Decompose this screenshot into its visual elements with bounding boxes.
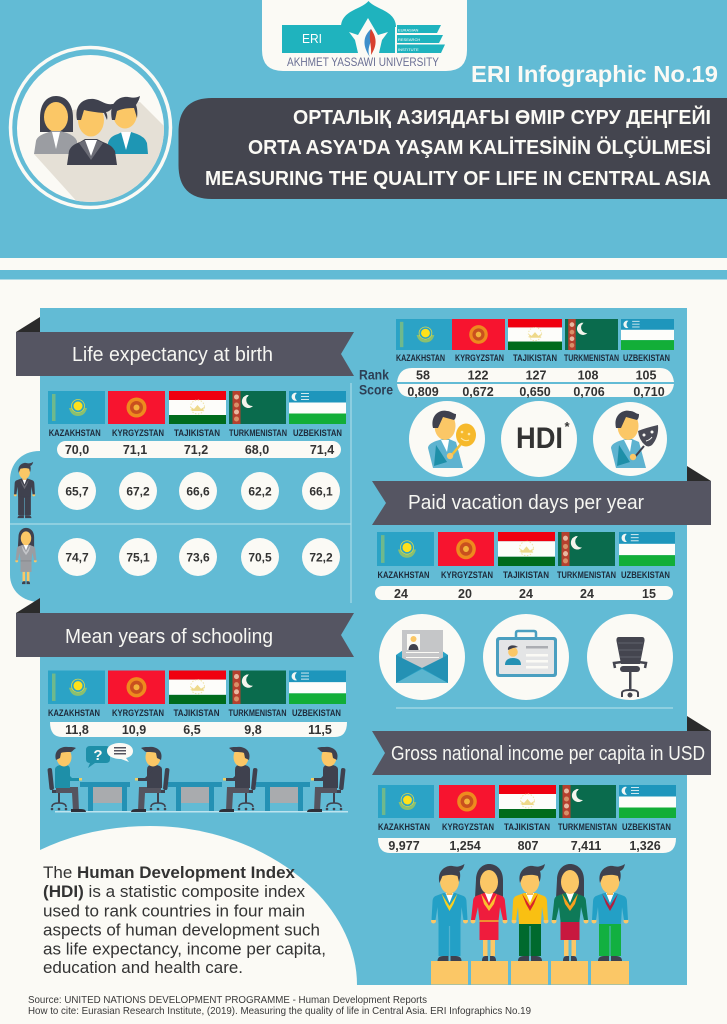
country labels: TAJIKISTAN xyxy=(174,428,220,439)
icon: ID badge xyxy=(483,614,569,700)
country labels: KYRGYZSTAN xyxy=(112,428,164,439)
logo: ERI Akhmet Yassawi University: AKHMET YASSAWI UNIVERSITY xyxy=(287,55,439,69)
male values: 65,7 xyxy=(65,484,89,498)
total values: 68,0 xyxy=(245,443,269,457)
text block: HDI definition: (HDI) is a statistic composite index xyxy=(43,882,305,901)
female values: 70,5 xyxy=(248,550,272,564)
values: 807 xyxy=(518,839,538,853)
total values: 71,2 xyxy=(184,443,208,457)
ribbon heading: gross national income xyxy=(372,716,711,775)
country labels xyxy=(49,428,342,439)
flags row xyxy=(396,319,674,350)
rank and score table: 127 xyxy=(526,368,546,382)
male values: 66,1 xyxy=(309,484,333,498)
panel: life expectancy xyxy=(14,317,354,584)
illustration: meeting at tables xyxy=(47,743,348,812)
female values: 72,2 xyxy=(309,550,333,564)
male values xyxy=(58,472,340,510)
female values: 74,7 xyxy=(65,550,89,564)
country labels: UZBEKISTAN xyxy=(293,428,342,439)
rank and score table: 0,809 xyxy=(407,385,439,399)
flags row xyxy=(48,670,346,704)
country labels: TURKMENISTAN xyxy=(558,822,617,833)
country labels: KYRGYZSTAN xyxy=(112,708,164,719)
rank and score table: 108 xyxy=(578,368,598,382)
values: 10,9 xyxy=(122,723,146,737)
female values: 73,6 xyxy=(186,550,210,564)
icon: HDI circle: * xyxy=(564,419,570,434)
main blue panel xyxy=(10,308,687,985)
rank and score table: 58 xyxy=(416,368,430,382)
icon: HDI circle: HDI xyxy=(516,422,563,455)
country labels: KYRGYZSTAN xyxy=(442,822,494,833)
source and citation xyxy=(28,994,531,1017)
text block: HDI definition: education and health care. xyxy=(43,958,243,977)
rank and score table: 0,706 xyxy=(573,385,605,399)
values: 9,8 xyxy=(244,723,262,737)
divider lines xyxy=(10,383,673,708)
values: 11,8 xyxy=(65,723,89,737)
rank and score table: Rank xyxy=(359,366,389,382)
country labels: KYRGYZSTAN xyxy=(441,570,493,581)
values xyxy=(50,722,347,737)
values: 24 xyxy=(394,587,408,601)
header band xyxy=(0,0,727,280)
country labels: TAJIKISTAN xyxy=(504,822,550,833)
icon: man with dark mask xyxy=(593,402,667,476)
rank and score table: 105 xyxy=(636,368,656,382)
flags row xyxy=(378,785,676,818)
values: 24 xyxy=(580,587,594,601)
country labels: UZBEKISTAN xyxy=(621,570,670,581)
country labels: TAJIKISTAN xyxy=(513,353,557,364)
total values: 71,1 xyxy=(123,443,147,457)
title pill xyxy=(178,98,727,199)
infographic number: ERI Infographic No.19 xyxy=(471,61,718,87)
values: 20 xyxy=(458,587,472,601)
rank and score table: Score xyxy=(359,382,393,398)
title pill: MEASURING THE QUALITY OF LIFE IN CENTRAL ASIA xyxy=(205,168,711,190)
total values xyxy=(57,441,341,458)
values xyxy=(375,586,673,601)
logo: ERI Akhmet Yassawi University: ERI xyxy=(302,32,322,46)
country labels: TURKMENISTAN xyxy=(229,428,287,439)
icon: office chair xyxy=(587,614,673,700)
flags row xyxy=(377,532,675,566)
country labels: KAZAKHSTAN xyxy=(49,428,101,439)
female values: 75,1 xyxy=(126,550,150,564)
ribbon heading: paid vacation days per year: Paid vacation days per year xyxy=(408,492,644,514)
title pill: ORTA ASYA'DA YAŞAM KALİTESİNİN ÖLÇÜLMESİ xyxy=(248,136,711,159)
rank and score table xyxy=(359,366,674,399)
icon: woman xyxy=(15,528,37,584)
country labels: TURKMENISTAN xyxy=(557,570,616,581)
country labels: TAJIKISTAN xyxy=(503,570,549,581)
icon: envelope with CV xyxy=(379,614,465,700)
country labels: KAZAKHSTAN xyxy=(396,353,445,364)
text block: HDI definition: used to rank countries in four main xyxy=(43,902,305,920)
values: 9,977 xyxy=(388,839,420,853)
total values: 70,0 xyxy=(65,443,89,457)
text block: HDI definition: as life expectancy, income per capita, xyxy=(43,940,326,958)
rank and score table: 122 xyxy=(468,368,488,382)
rank and score table: 0,672 xyxy=(462,385,494,399)
logo: ERI Akhmet Yassawi University xyxy=(262,0,467,71)
country labels: UZBEKISTAN xyxy=(292,708,341,719)
values: 1,326 xyxy=(629,839,661,853)
icon: three business people in circle xyxy=(10,48,170,208)
country labels: UZBEKISTAN xyxy=(623,353,670,364)
ribbon heading: paid vacation days per year xyxy=(372,466,711,525)
country labels xyxy=(378,822,671,833)
total values: 71,4 xyxy=(310,443,334,457)
source and citation: Source: UNITED NATIONS DEVELOPMENT PROGRAMME - Human Development Reports xyxy=(28,994,427,1006)
panel: paid vacation days xyxy=(372,466,711,700)
country labels: KAZAKHSTAN xyxy=(48,708,100,719)
values: 1,254 xyxy=(449,839,481,853)
title pill: ОРТАЛЫҚ АЗИЯДАҒЫ ӨМІР СҮРУ ДЕҢГЕЙІ xyxy=(293,105,711,129)
country labels: TURKMENISTAN xyxy=(228,708,287,719)
ribbon heading: mean years of schooling: Mean years of schooling xyxy=(65,626,273,648)
country labels xyxy=(48,708,341,719)
ribbon heading: mean years of schooling xyxy=(16,598,354,657)
values: 15 xyxy=(642,587,656,601)
logo: ERI Akhmet Yassawi University: EURASIAN xyxy=(398,28,419,32)
country labels: TURKMENISTAN xyxy=(564,353,619,364)
illustration: meeting at tables: ? xyxy=(93,747,103,764)
male values: 67,2 xyxy=(126,484,150,498)
male values: 62,2 xyxy=(248,484,272,498)
panel: HDI xyxy=(359,319,674,477)
values: 6,5 xyxy=(183,723,201,737)
rank and score table: 0,710 xyxy=(633,385,665,399)
values: 11,5 xyxy=(308,723,332,737)
flags row xyxy=(48,391,346,424)
values xyxy=(378,838,676,853)
country labels xyxy=(396,353,670,364)
ribbon heading: life expectancy at birth xyxy=(16,317,354,376)
text block: HDI definition: The Human Development Index xyxy=(43,863,296,882)
source and citation: How to cite: Eurasian Research Institute, (2019). Measuring the quality of life in Central Asia. ERI Infographics No.19 xyxy=(28,1005,531,1017)
illustration: five people on podiums xyxy=(431,864,629,984)
panel: mean years of schooling xyxy=(16,598,354,812)
country labels: KYRGYZSTAN xyxy=(455,353,504,364)
values: 24 xyxy=(519,587,533,601)
rank and score table: 0,650 xyxy=(519,385,551,399)
country labels: TAJIKISTAN xyxy=(174,708,220,719)
country labels: UZBEKISTAN xyxy=(622,822,671,833)
icon: man with happy mask xyxy=(409,401,485,477)
ribbon heading: life expectancy at birth: Life expectancy at birth xyxy=(72,344,273,366)
female values xyxy=(58,538,340,576)
country labels: KAZAKHSTAN xyxy=(378,822,430,833)
male values: 66,6 xyxy=(186,484,210,498)
country labels xyxy=(378,570,670,581)
values: 7,411 xyxy=(571,839,601,853)
country labels: KAZAKHSTAN xyxy=(378,570,430,581)
logo: ERI Akhmet Yassawi University: INSTITUTE xyxy=(398,47,419,52)
icon: HDI circle xyxy=(501,401,577,477)
text block: HDI definition xyxy=(43,863,326,977)
logo: ERI Akhmet Yassawi University: RESEARCH xyxy=(398,37,420,42)
text block: HDI definition: aspects of human development such xyxy=(43,920,320,940)
panel: gross national income xyxy=(372,716,711,984)
cream HDI definition area xyxy=(40,826,357,986)
icon: man xyxy=(14,462,35,518)
